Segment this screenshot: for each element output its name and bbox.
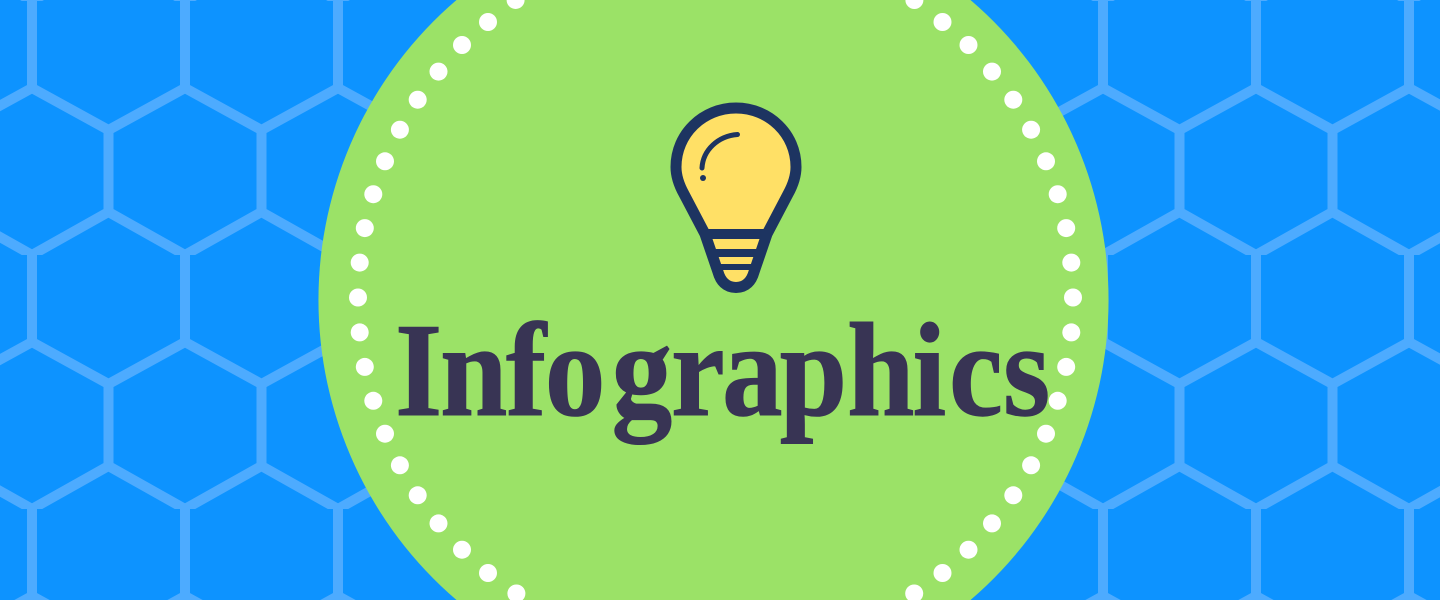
icon: light bulb — [676, 108, 796, 288]
white dotted ring — [349, 0, 1082, 600]
green central circle — [318, 0, 1109, 600]
title: Infographics: Infographics — [395, 295, 1050, 444]
